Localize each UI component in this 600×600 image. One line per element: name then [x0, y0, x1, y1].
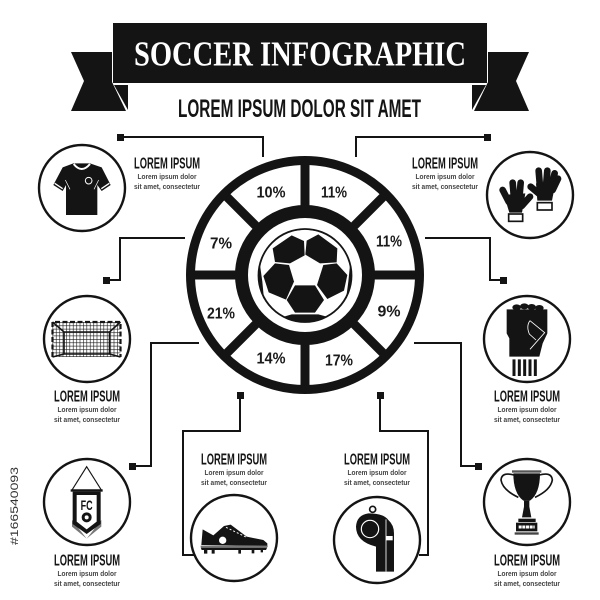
stock image number: #166540093 [9, 467, 21, 545]
text: shirt label: LOREM IPSUM [134, 156, 200, 172]
text: boot label: LOREM IPSUM [201, 452, 267, 468]
text: whistle label: Lorem ipsum dolor [348, 468, 407, 477]
panel: pennant [44, 459, 130, 545]
subtitle: LOREM IPSUM DOLOR SIT AMET [178, 95, 421, 123]
text: gloves label [412, 156, 478, 191]
panel: boot [191, 495, 277, 581]
text: boot label: Lorem ipsum dolor [204, 468, 264, 477]
panel: pennant: FC [81, 497, 93, 513]
text: gloves label: sit amet, consectetur [412, 182, 478, 191]
text: whistle label [344, 452, 410, 487]
text: shirt label [134, 156, 200, 191]
text: goal label [54, 388, 120, 424]
soccer ball [258, 229, 352, 322]
percent labels: 17% [325, 352, 353, 370]
percent labels: 10% [256, 184, 286, 202]
text: trophy label: Lorem ipsum dolor [498, 569, 557, 578]
text: boot label [201, 452, 267, 487]
panel: trophy [484, 459, 570, 545]
panel: goal [44, 296, 130, 382]
text: trophy label: sit amet, consectetur [494, 579, 560, 588]
panel: fist glove [484, 296, 570, 382]
text: whistle label: sit amet, consectetur [344, 478, 410, 487]
text: fist glove label [494, 388, 560, 424]
text: goal label: Lorem ipsum dolor [58, 405, 117, 414]
text: fist glove label: Lorem ipsum dolor [498, 405, 557, 414]
text: pennant label: LOREM IPSUM [54, 552, 120, 570]
text: whistle label: LOREM IPSUM [344, 452, 410, 468]
text: pennant label: sit amet, consectetur [54, 579, 120, 588]
text: goal label: LOREM IPSUM [54, 388, 120, 406]
percent labels: 11% [376, 234, 402, 250]
text: shirt label: Lorem ipsum dolor [138, 172, 197, 181]
text: gloves label: LOREM IPSUM [412, 156, 478, 172]
text: boot label: sit amet, consectetur [201, 478, 267, 487]
title banner: SOCCER INFOGRAPHIC [134, 34, 466, 74]
text: goal label: sit amet, consectetur [54, 415, 120, 424]
percent labels: 7% [210, 236, 232, 252]
percent labels: 14% [256, 350, 286, 368]
title banner [71, 23, 529, 111]
wheel chart [187, 157, 423, 393]
text: gloves label: Lorem ipsum dolor [416, 172, 475, 181]
text: pennant label [54, 552, 120, 588]
text: fist glove label: sit amet, consectetur [494, 415, 560, 424]
percent labels: 9% [378, 304, 401, 320]
panel: shirt [39, 145, 125, 231]
percent labels: 21% [207, 306, 235, 322]
panel: whistle [334, 497, 420, 583]
text: shirt label: sit amet, consectetur [134, 182, 200, 191]
panel: gloves [487, 152, 573, 238]
connector lines [103, 134, 507, 555]
percent labels [207, 184, 402, 370]
text: pennant label: Lorem ipsum dolor [58, 569, 117, 578]
percent labels: 11% [321, 184, 347, 202]
text: trophy label [494, 552, 560, 588]
